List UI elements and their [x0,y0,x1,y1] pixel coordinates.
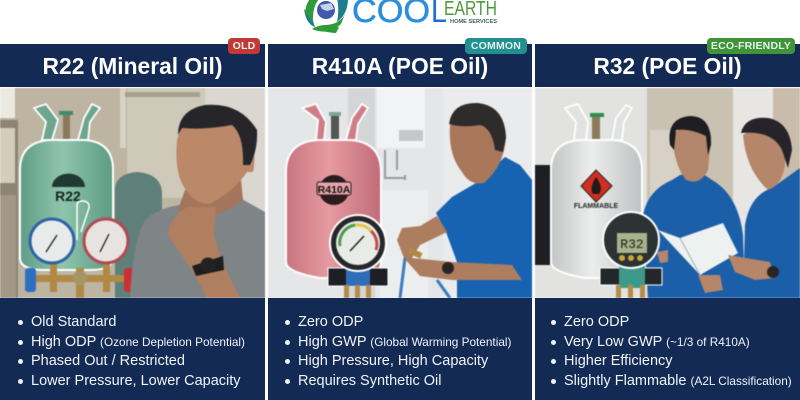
list: R410A properties: Requires Synthetic Oil [298,372,441,388]
digital gauge [600,212,662,298]
wall background [268,88,532,298]
logo wordmark [352,0,498,29]
list: R22 properties: Lower Pressure, Lower Capacity [31,372,241,388]
list: R32 properties: Zero ODP [564,314,629,330]
panel: R32 header [535,44,800,87]
logo wordmark: HOME SERVICES [450,19,498,25]
badge: eco-friendly: ECO-FRIENDLY [711,40,791,52]
list: R410A properties [285,314,511,388]
technicians [643,116,800,298]
badge: common [465,38,527,54]
badge: eco-friendly [707,38,795,54]
cylinder: R32: FLAMMABLE [574,203,618,210]
list: R22 properties: Old Standard [31,314,116,330]
room background [535,88,800,298]
list: R32 properties: Higher Efficiency [564,353,673,369]
panel: R410A features [268,298,532,400]
icon: logo globe [304,0,348,33]
badge: common: COMMON [471,40,521,52]
panel: R22 header: R22 (Mineral Oil) [43,52,222,78]
panel: R22 features [0,298,265,400]
panel: R22 header [0,44,265,87]
man [130,105,265,298]
list: R410A properties: Zero ODP [298,314,363,330]
logo [304,0,498,33]
wall background [0,88,265,298]
list: R22 properties [18,314,245,388]
badge: old [228,38,260,54]
panel: R32 features [535,298,800,400]
pressure gauge [328,215,388,298]
panel: R32 header: R32 (POE Oil) [593,52,742,78]
cylinder: R410A: R410A [318,184,351,196]
list: R32 properties: Very Low GWP (~1/3 of R410A) [564,334,750,350]
panel: R410A header [268,44,532,87]
list: R410A properties: High Pressure, High Capacity [298,353,488,369]
cylinder: R22 [20,104,113,270]
background cylinder [115,172,162,298]
list: R410A properties: High GWP (Global Warming Potential) [298,334,511,350]
technician [397,103,532,298]
photo: R32 scene [534,88,800,298]
digital gauge: R32 [620,237,644,252]
panel: R410A header: R410A (POE Oil) [312,52,488,78]
photo: R410A scene [268,88,533,298]
cylinder: R32 [551,104,642,278]
list: R22 properties: High ODP (Ozone Depletion Potential) [31,334,245,350]
photo: R22 scene [0,88,266,298]
manifold gauges [25,219,135,298]
list: R32 properties [551,314,792,388]
cylinder: R410A [286,104,381,278]
list: R32 properties: Slightly Flammable (A2L Classification) [564,372,792,388]
badge: old: OLD [233,40,255,52]
cylinder: R22: R22 [55,188,81,204]
list: R22 properties: Phased Out / Restricted [31,353,185,369]
